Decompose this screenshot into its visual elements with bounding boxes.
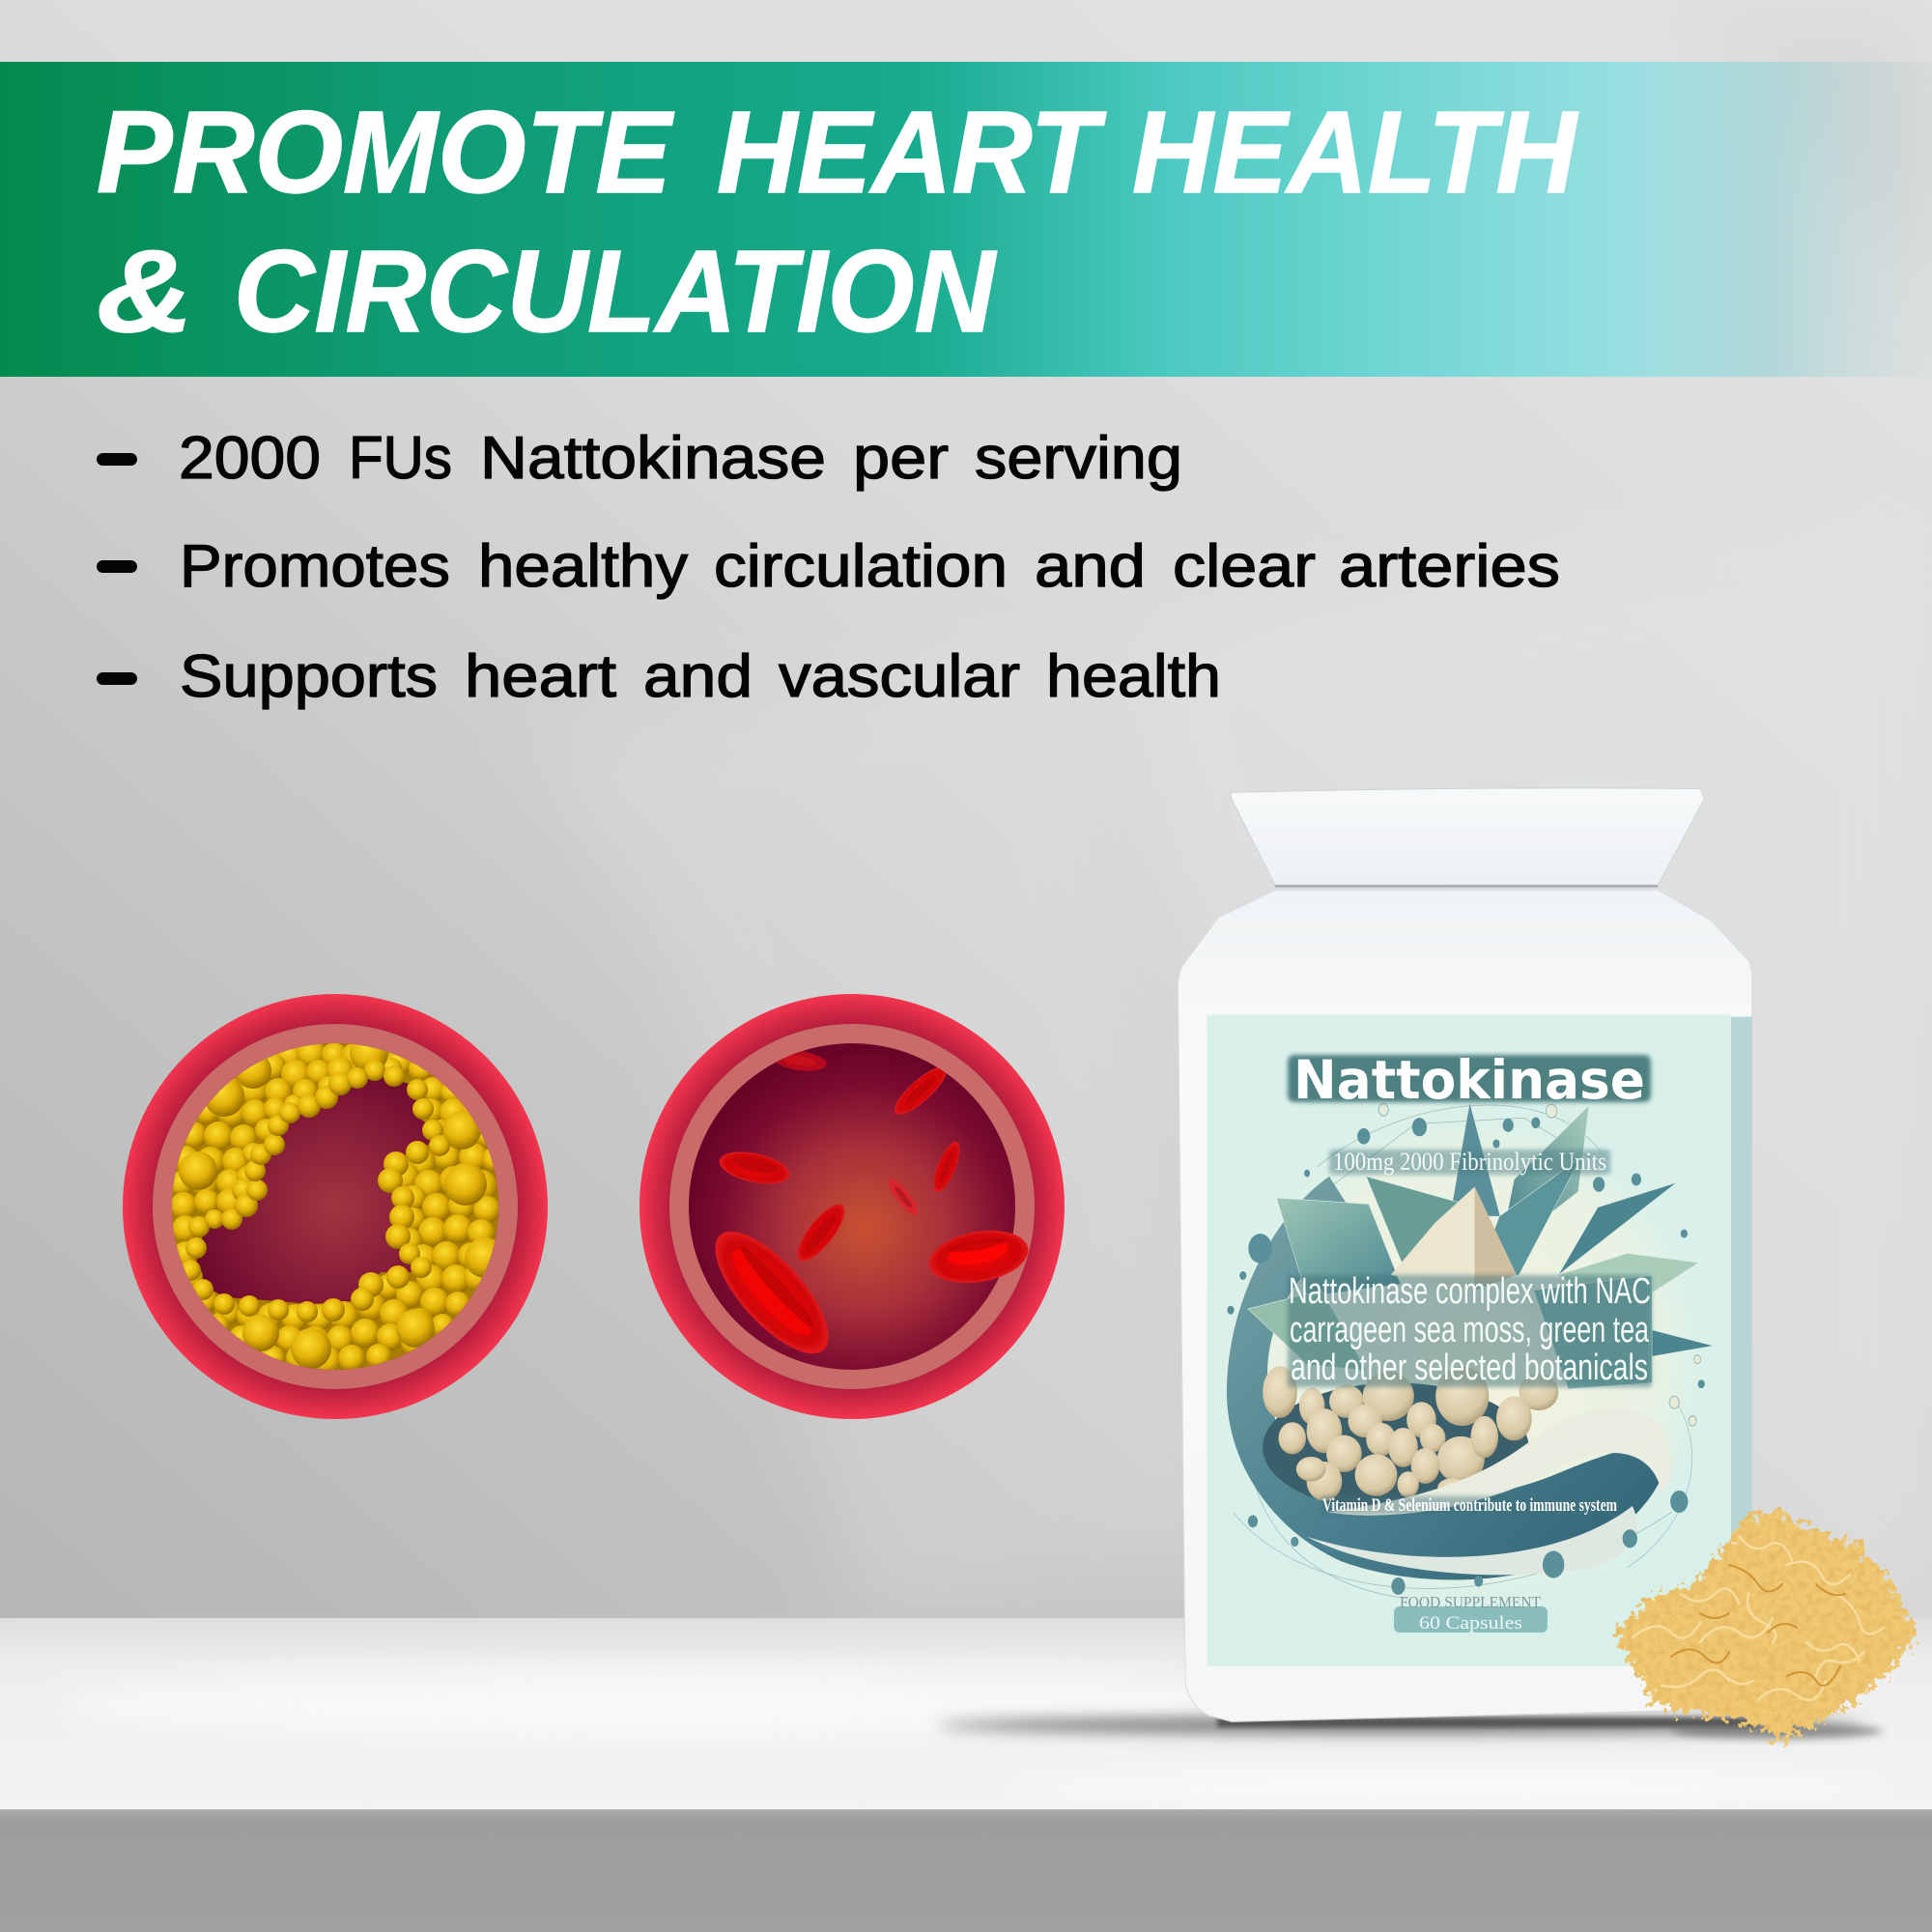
bottle shadow on floor (937, 1718, 1864, 1733)
side label strip (1731, 1017, 1752, 1541)
bullet 2: healthy (478, 533, 688, 600)
bullet 3: vascular (779, 643, 1020, 710)
benefits list (97, 425, 1560, 710)
red blood cell (717, 1147, 792, 1189)
cream waves (1326, 1408, 1671, 1516)
strength line: 100mg 2000 Fibrinolytic Units (1333, 1148, 1606, 1176)
title banner (0, 62, 1932, 377)
label glow (1204, 1087, 1726, 1630)
bullet 1: FUs (349, 425, 452, 492)
bullet 2: arteries (1339, 533, 1560, 600)
label background (1207, 1015, 1731, 1666)
title: PROMOTE (97, 86, 674, 217)
red blood cell (928, 1139, 965, 1195)
bottle shapes (1178, 788, 1752, 1721)
floating particles (1227, 1118, 1705, 1595)
floor surface (0, 1618, 1932, 1809)
bullet 2: and (1035, 533, 1146, 600)
bean hollow (1263, 1382, 1529, 1512)
title: HEART (717, 86, 1107, 217)
healthy artery with red blood cells (639, 994, 1065, 1419)
leaves (1248, 1102, 1714, 1389)
bullet 1 (97, 425, 1182, 492)
sea moss (1614, 1509, 1916, 1740)
bottle cap (1231, 788, 1704, 885)
red blood cell (790, 1198, 852, 1267)
product bottle (1178, 788, 1752, 1721)
bullet 1: serving (975, 425, 1182, 492)
bullet 1: 2000 (179, 425, 321, 492)
bullet 1: per (853, 425, 949, 492)
nattokinase soybeans (1263, 1366, 1558, 1501)
bullet 2: clear (1173, 533, 1316, 600)
description block (1288, 1271, 1652, 1388)
bullet 3: and (643, 643, 753, 710)
red blood cell large (697, 1214, 846, 1371)
artery with plaque (123, 994, 548, 1419)
network lines (1234, 1105, 1692, 1599)
plaque deposits (172, 1043, 498, 1370)
title: CIRCULATION (234, 225, 997, 356)
bottle body (1178, 890, 1752, 1721)
description block: and other selected botanicals (1291, 1348, 1648, 1388)
product name badge: Nattokinase (1293, 1049, 1645, 1111)
title: HEALTH (1132, 86, 1578, 217)
bullet 1: Nattokinase (480, 425, 826, 492)
capacity badge: 60 Capsules (1419, 1613, 1522, 1634)
small cells clipped to lumen (776, 1051, 947, 1115)
bullet 2 (97, 533, 1560, 600)
red blood cell right (924, 1223, 1033, 1291)
bullet 3: Supports (180, 643, 438, 710)
description block: Nattokinase complex with NAC (1289, 1271, 1651, 1312)
bullet 3: health (1046, 643, 1221, 710)
bullet 2: Promotes (180, 533, 450, 600)
capacity badge (1394, 1593, 1548, 1634)
central peak (1391, 1187, 1517, 1291)
swirl (1227, 1177, 1666, 1579)
red blood cell (884, 1176, 923, 1218)
capacity badge: FOOD SUPPLEMENT (1400, 1593, 1542, 1611)
title (97, 86, 1578, 356)
counter front (0, 1809, 1932, 1932)
vitamin claim: Vitamin D & Selenium contribute to immune system (1322, 1495, 1617, 1516)
bullet 3 (97, 643, 1221, 710)
description block: carrageen sea moss, green tea (1290, 1310, 1650, 1350)
bullet 2: circulation (714, 533, 1008, 600)
bullet 3: heart (465, 643, 616, 710)
title: & (97, 225, 193, 356)
